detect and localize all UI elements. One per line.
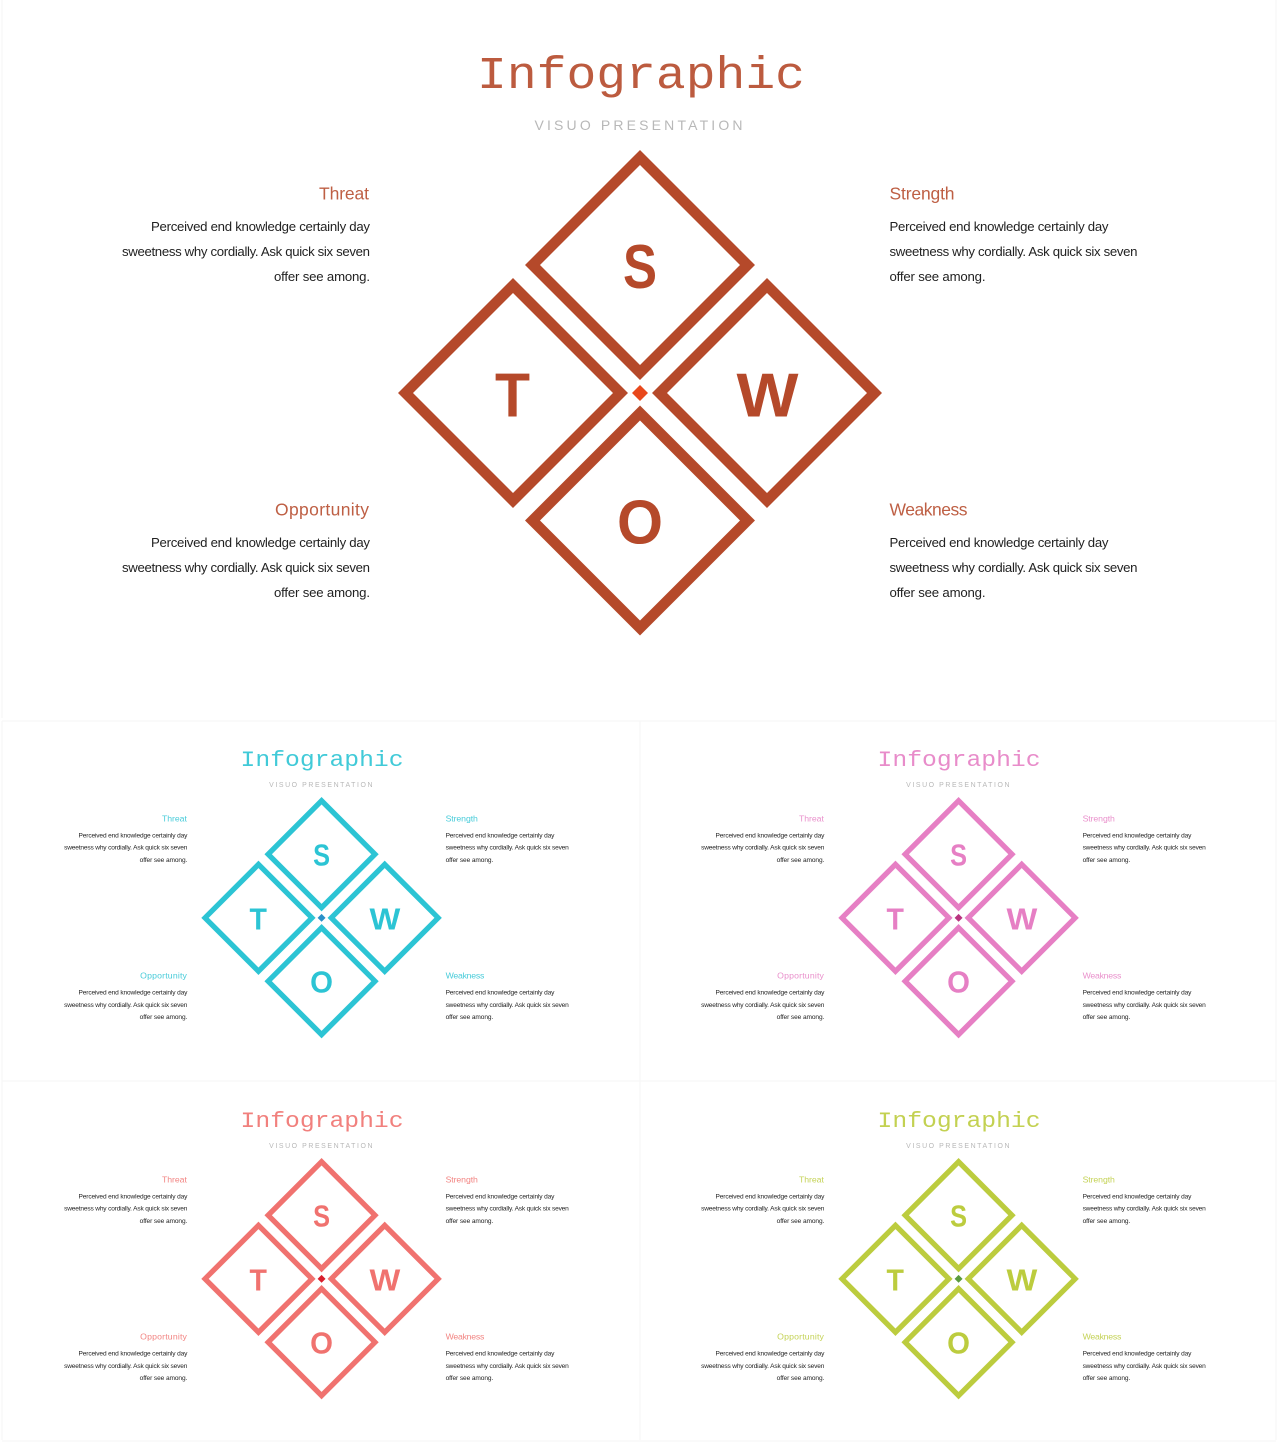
text block: opportunity: Opportunity (140, 971, 188, 981)
diamond O: O (310, 965, 333, 1000)
text block: strength: sweetness why cordially. Ask quick six seven (1083, 845, 1206, 852)
text block: weakness: sweetness why cordially. Ask quick six seven (1083, 1002, 1206, 1009)
text block: weakness: offer see among. (446, 1375, 493, 1382)
text block: threat: Threat (319, 184, 369, 204)
diamond T (842, 864, 949, 971)
diamond S: S (950, 838, 967, 873)
text block: opportunity: Opportunity (275, 500, 369, 520)
text block: strength: Perceived end knowledge certainly day (446, 1193, 555, 1200)
text block: weakness: sweetness why cordially. Ask quick six seven (446, 1363, 569, 1370)
text block: opportunity (64, 1332, 188, 1382)
text block: strength: offer see among. (1083, 857, 1130, 864)
text block: weakness: sweetness why cordially. Ask quick six seven (1083, 1363, 1206, 1370)
text block: threat: offer see among. (140, 1218, 188, 1225)
text block: opportunity: Perceived end knowledge certainly day (79, 989, 188, 996)
panel: teal SWOT (64, 747, 569, 1035)
text block: threat (122, 184, 370, 284)
diamond W (331, 1225, 438, 1332)
text block: weakness: Weakness (1083, 1332, 1122, 1342)
diamond W: W (736, 362, 799, 430)
title: Infographic (477, 51, 805, 102)
diamond O (268, 1289, 375, 1396)
text block: weakness: offer see among. (890, 585, 986, 600)
diamond S (268, 801, 375, 908)
diamond O: O (617, 488, 663, 558)
diamond S (532, 158, 748, 372)
text block: weakness (446, 971, 569, 1021)
text block: opportunity (122, 500, 370, 600)
title: Infographic (878, 747, 1041, 773)
text block: weakness: Weakness (446, 971, 485, 981)
text block: strength (1083, 814, 1206, 864)
diamond T (406, 286, 620, 500)
text block: weakness (446, 1332, 569, 1382)
text block: opportunity: offer see among. (777, 1014, 825, 1021)
panel: red SWOT (64, 1108, 569, 1396)
center dot (632, 385, 648, 401)
text block: threat: offer see among. (274, 269, 370, 284)
diamond S: S (623, 233, 657, 302)
text block: opportunity (701, 1332, 825, 1382)
text block: weakness (890, 500, 1138, 600)
text block: weakness: offer see among. (446, 1014, 493, 1021)
diamond W: W (1007, 902, 1038, 937)
text block: weakness: sweetness why cordially. Ask quick six seven (890, 560, 1138, 575)
text block: strength: sweetness why cordially. Ask quick six seven (1083, 1206, 1206, 1213)
text block: threat: Perceived end knowledge certainly day (151, 219, 370, 234)
subtitle: VISUO PRESENTATION (269, 1143, 373, 1150)
text block: strength (446, 814, 569, 864)
text block: threat: offer see among. (777, 857, 825, 864)
text block: threat: sweetness why cordially. Ask quick six seven (64, 845, 188, 852)
subtitle: VISUO PRESENTATION (906, 1143, 1010, 1150)
text block: opportunity: sweetness why cordially. Ask quick six seven (64, 1002, 188, 1009)
text block: weakness: Perceived end knowledge certainly day (890, 535, 1109, 550)
diamond S: S (313, 838, 330, 873)
text block: strength: offer see among. (890, 269, 986, 284)
text block: weakness (1083, 1332, 1206, 1382)
title: Infographic (241, 1108, 404, 1134)
text block: opportunity: Perceived end knowledge certainly day (151, 535, 370, 550)
text block: strength: offer see among. (446, 857, 493, 864)
subtitle: VISUO PRESENTATION (534, 117, 742, 133)
text block: strength: offer see among. (1083, 1218, 1130, 1225)
center dot (318, 1275, 326, 1283)
text block: opportunity: sweetness why cordially. Ask quick six seven (701, 1002, 825, 1009)
text block: strength: sweetness why cordially. Ask quick six seven (890, 244, 1138, 259)
text block: strength: sweetness why cordially. Ask quick six seven (446, 1206, 569, 1213)
diamond T (842, 1225, 949, 1332)
text block: opportunity (701, 971, 825, 1021)
text block: opportunity: sweetness why cordially. Ask quick six seven (122, 560, 370, 575)
text block: strength: Strength (446, 814, 478, 824)
diamond T (205, 864, 312, 971)
text block: strength: Strength (890, 184, 954, 204)
text block: weakness: sweetness why cordially. Ask quick six seven (446, 1002, 569, 1009)
text block: strength: Perceived end knowledge certainly day (1083, 1193, 1192, 1200)
text block: strength: sweetness why cordially. Ask quick six seven (446, 845, 569, 852)
text block: opportunity: Opportunity (777, 1332, 825, 1342)
diamond W: W (370, 902, 401, 937)
text block: threat (64, 1175, 188, 1225)
diamond O (268, 928, 375, 1035)
panel: pink SWOT (701, 747, 1206, 1035)
text block: opportunity: offer see among. (140, 1014, 188, 1021)
diamond O (905, 1289, 1012, 1396)
diamond W: W (1007, 1263, 1038, 1298)
text block: weakness: Perceived end knowledge certainly day (1083, 1350, 1192, 1357)
text block: opportunity: Perceived end knowledge certainly day (716, 989, 825, 996)
diamond O (905, 928, 1012, 1035)
diamond O: O (947, 1326, 970, 1361)
text block: threat: Threat (162, 1175, 187, 1185)
text block: strength: Perceived end knowledge certainly day (890, 219, 1109, 234)
text block: threat: Threat (162, 814, 187, 824)
text block: strength: Perceived end knowledge certainly day (446, 832, 555, 839)
text block: strength: Strength (1083, 814, 1115, 824)
diamond T: T (887, 1263, 904, 1298)
diamond W (968, 864, 1075, 971)
text block: opportunity: Opportunity (140, 1332, 188, 1342)
text block: threat: Perceived end knowledge certainly day (716, 832, 825, 839)
center dot (955, 1275, 963, 1283)
text block: strength: Strength (1083, 1175, 1115, 1185)
panel: green SWOT (701, 1108, 1206, 1396)
text block: threat: Perceived end knowledge certainly day (79, 832, 188, 839)
text block: threat: Threat (799, 1175, 824, 1185)
diamond T: T (250, 902, 267, 937)
text block: threat: sweetness why cordially. Ask quick six seven (701, 1206, 825, 1213)
text block: opportunity: sweetness why cordially. Ask quick six seven (64, 1363, 188, 1370)
diamond O: O (947, 965, 970, 1000)
text block: weakness: Perceived end knowledge certainly day (446, 1350, 555, 1357)
text block: opportunity: offer see among. (777, 1375, 825, 1382)
diamond W (660, 286, 874, 500)
diamond W (968, 1225, 1075, 1332)
text block: strength: Perceived end knowledge certainly day (1083, 832, 1192, 839)
text block: weakness: offer see among. (1083, 1375, 1130, 1382)
text block: weakness: Weakness (1083, 971, 1122, 981)
diamond W: W (370, 1263, 401, 1298)
diamond W (331, 864, 438, 971)
panel: main SWOT brown (122, 51, 1138, 628)
text block: threat: sweetness why cordially. Ask quick six seven (122, 244, 370, 259)
diamond S (905, 1162, 1012, 1269)
text block: threat: offer see among. (140, 857, 188, 864)
text block: strength (890, 184, 1138, 284)
text block: threat (701, 814, 825, 864)
text block: weakness: Perceived end knowledge certainly day (446, 989, 555, 996)
diamond O (532, 413, 748, 628)
text block: strength: offer see among. (446, 1218, 493, 1225)
text block: strength (446, 1175, 569, 1225)
text block: threat: Threat (799, 814, 824, 824)
diamond S: S (313, 1199, 330, 1234)
text block: threat: sweetness why cordially. Ask quick six seven (64, 1206, 188, 1213)
diamond T: T (887, 902, 904, 937)
subtitle: VISUO PRESENTATION (906, 782, 1010, 789)
center dot (955, 914, 963, 922)
diamond S (905, 801, 1012, 908)
title: Infographic (878, 1108, 1041, 1134)
center dot (318, 914, 326, 922)
text block: weakness: Weakness (446, 1332, 485, 1342)
text block: threat: sweetness why cordially. Ask quick six seven (701, 845, 825, 852)
diamond T: T (495, 362, 530, 430)
diamond S: S (950, 1199, 967, 1234)
text block: opportunity: Perceived end knowledge certainly day (79, 1350, 188, 1357)
text block: strength: Strength (446, 1175, 478, 1185)
text block: threat: offer see among. (777, 1218, 825, 1225)
text block: opportunity: Perceived end knowledge certainly day (716, 1350, 825, 1357)
text block: opportunity: offer see among. (140, 1375, 188, 1382)
text block: weakness (1083, 971, 1206, 1021)
text block: strength (1083, 1175, 1206, 1225)
text block: threat: Perceived end knowledge certainly day (716, 1193, 825, 1200)
text block: weakness: offer see among. (1083, 1014, 1130, 1021)
text block: threat (64, 814, 188, 864)
text block: threat (701, 1175, 825, 1225)
text block: opportunity (64, 971, 188, 1021)
text block: weakness: Weakness (890, 500, 968, 520)
diamond T: T (250, 1263, 267, 1298)
diamond O: O (310, 1326, 333, 1361)
text block: opportunity: Opportunity (777, 971, 825, 981)
title: Infographic (241, 747, 404, 773)
text block: threat: Perceived end knowledge certainly day (79, 1193, 188, 1200)
text block: weakness: Perceived end knowledge certainly day (1083, 989, 1192, 996)
diamond S (268, 1162, 375, 1269)
subtitle: VISUO PRESENTATION (269, 782, 373, 789)
diamond T (205, 1225, 312, 1332)
text block: opportunity: sweetness why cordially. Ask quick six seven (701, 1363, 825, 1370)
text block: opportunity: offer see among. (274, 585, 370, 600)
